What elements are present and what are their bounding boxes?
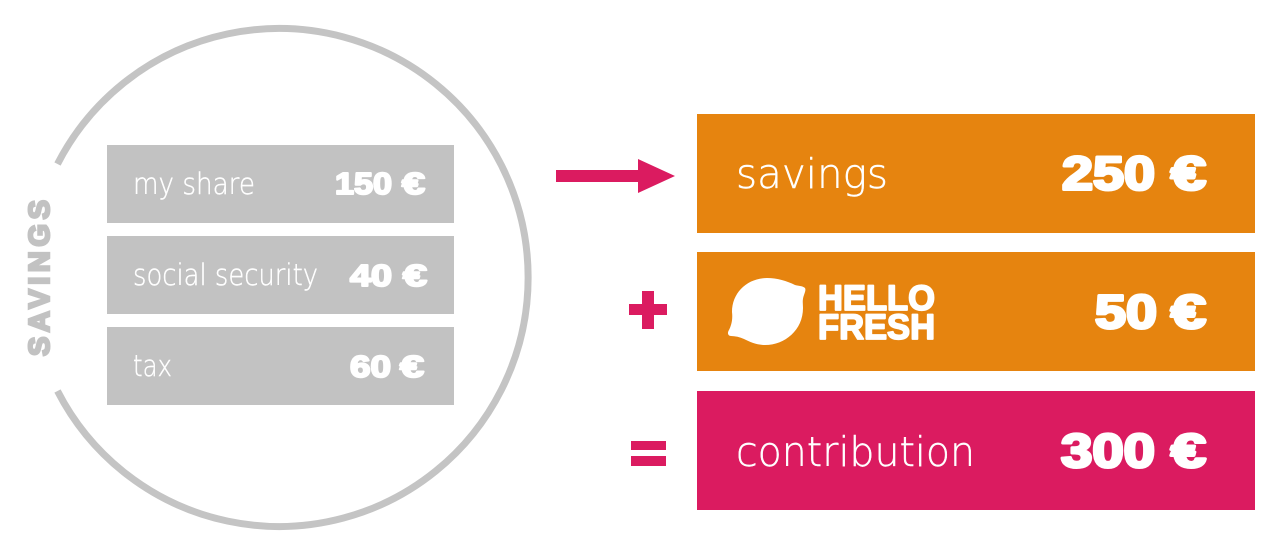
logo wordmark: HELLO <box>818 279 935 318</box>
icon: lemon logo <box>728 278 805 345</box>
panel: tax <box>107 327 454 405</box>
panel: my share <box>107 145 454 223</box>
panel: savings total: € <box>1171 146 1206 200</box>
logo wordmark <box>818 279 935 347</box>
equals sign <box>631 441 666 466</box>
panel: my share: € <box>402 166 425 201</box>
panel: HelloFresh contribution: € <box>1171 285 1206 338</box>
plus sign <box>629 291 667 329</box>
circle label: savings: SAVINGS <box>24 200 56 356</box>
panel: my share: 150 <box>335 166 392 201</box>
panel: social security: 40 <box>350 258 392 293</box>
panel: HelloFresh contribution: 50 <box>1095 285 1157 338</box>
panel: contribution total: contribution <box>736 428 975 476</box>
panel: my share: my share <box>133 167 255 201</box>
panel: social security: € <box>403 258 427 293</box>
panel: social security <box>107 236 454 314</box>
panel: contribution total: € <box>1171 424 1206 477</box>
circle outline <box>58 29 528 527</box>
panel: tax: € <box>400 349 424 384</box>
panel: contribution total: 300 <box>1061 424 1155 477</box>
panel: social security: social security <box>133 258 318 292</box>
panel: savings total: savings <box>736 150 888 198</box>
panel: tax: 60 <box>350 349 391 384</box>
logo wordmark: FRESH <box>818 308 935 347</box>
panel: HelloFresh contribution <box>697 252 1255 371</box>
panel: tax: tax <box>133 349 172 383</box>
panel: savings total: 250 <box>1062 146 1155 200</box>
arrow <box>556 159 675 193</box>
panel: savings total <box>697 114 1255 233</box>
panel: contribution total <box>697 391 1255 510</box>
